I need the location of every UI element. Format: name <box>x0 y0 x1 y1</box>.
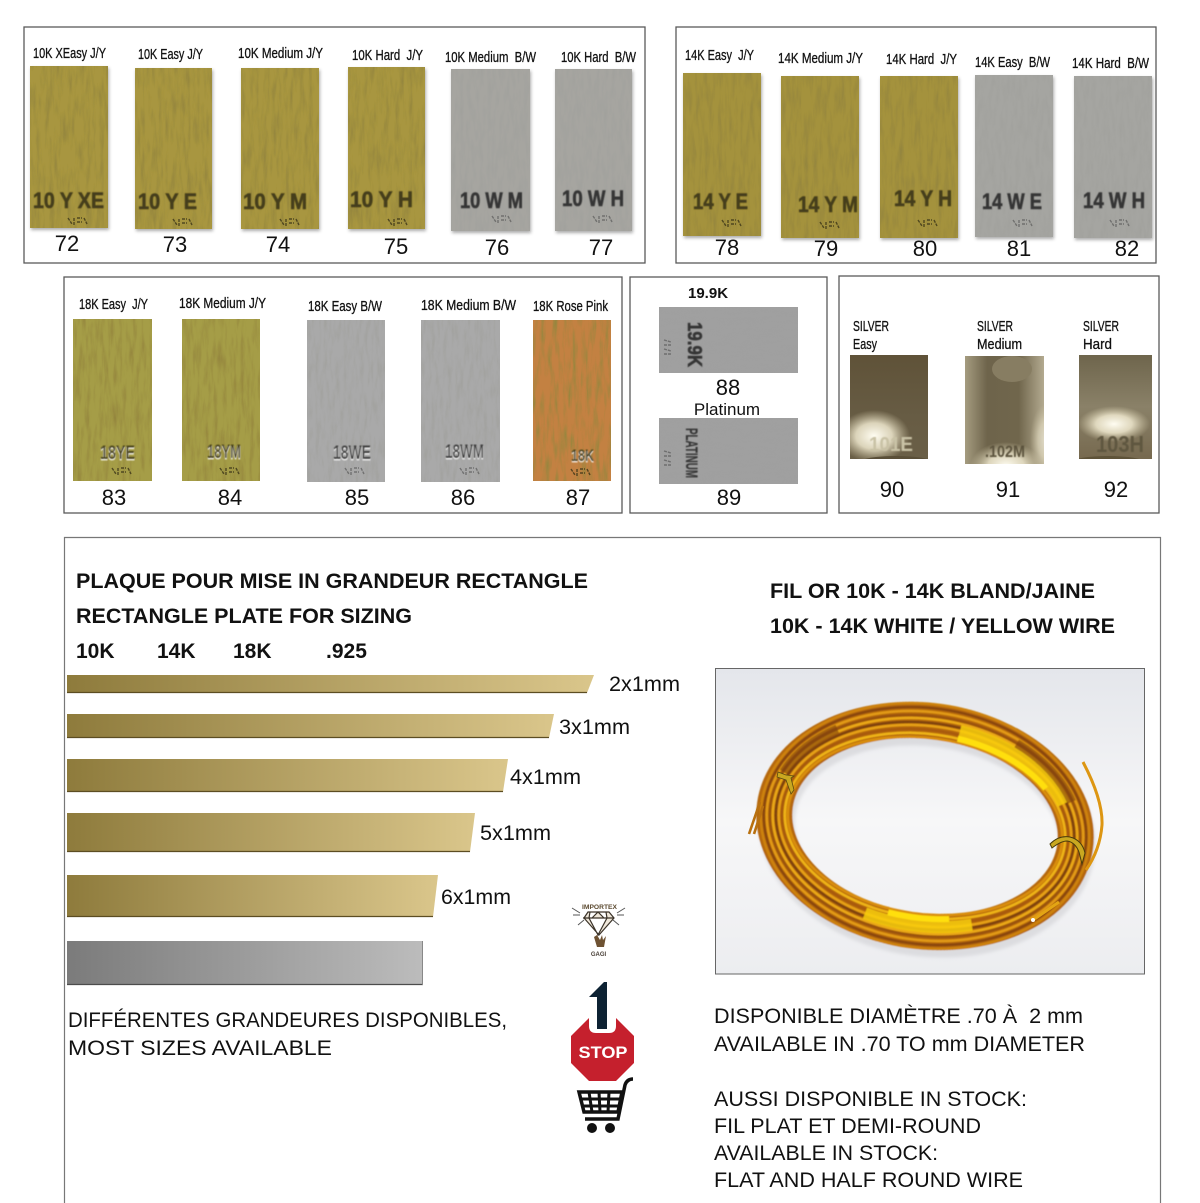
icon: 1 stop sign: STOP <box>578 1043 628 1062</box>
plate labels 14K: 14K Easy J/Y <box>685 47 754 64</box>
plate 78: 14K Easy yellow <box>683 73 762 238</box>
plate numbers 72-77: 72 <box>55 231 79 256</box>
plate labels 18K: 18K Easy B/W <box>308 298 383 315</box>
plate 89: platinum: PLATINUM <box>682 428 701 478</box>
bar: 4x1mm: 4x1mm <box>510 765 581 789</box>
plate labels 18K: 18K Medium B/W <box>421 297 517 314</box>
bar: 4x1mm <box>67 759 581 792</box>
karat list <box>76 640 367 663</box>
plate 73: 10K Easy yellow: 10 Y E <box>138 189 197 214</box>
plate 92: silver hard: 103H <box>1096 431 1144 457</box>
text: sizes available: DIFFÉRENTES GRANDEURES DISPONIBLES, <box>68 1007 507 1032</box>
heading: wire: FIL OR 10K - 14K BLAND/JAINE <box>770 580 1095 603</box>
plate 79: 14K Medium yellow: 14 Y M <box>798 192 858 217</box>
plate 87: 18K rose pink <box>533 320 611 481</box>
plate 88: 19.9K <box>659 307 798 373</box>
plate labels 10K: 10K Medium J/Y <box>238 45 323 62</box>
number 88: 88 <box>716 375 740 400</box>
plate numbers 83-87: 87 <box>566 485 590 510</box>
plate 80: 14K Hard yellow: 14 Y H <box>894 186 952 211</box>
plate numbers 90-92: 92 <box>1104 477 1128 502</box>
plate 84: 18K Medium yellow: 18YM <box>207 442 241 463</box>
icon: Importex Gagi diamond logo: GAGI <box>591 952 606 958</box>
plate 75: 10K Hard yellow <box>348 67 426 231</box>
bar: 2x1mm <box>67 672 680 696</box>
plate labels 10K: 10K Medium B/W <box>445 49 537 66</box>
silver labels: SILVER <box>1083 318 1119 335</box>
plate 80: 14K Hard yellow <box>880 76 959 240</box>
plate 77: 10K Hard white: 10 W H <box>562 186 624 211</box>
plate 74: 10K Medium yellow: 10 Y M <box>243 189 307 214</box>
plate numbers 78-82: 81 <box>1007 236 1031 261</box>
plate 86: 18K Medium white <box>421 320 500 482</box>
text: wire availability: DISPONIBLE DIAMÈTRE .70 À 2 mm <box>714 1003 1083 1028</box>
plate numbers 78-82: 79 <box>814 236 838 261</box>
bar: silver plate <box>67 941 423 985</box>
plate numbers 72-77: 73 <box>163 232 187 257</box>
karat list: 10K <box>76 640 115 663</box>
plate 91: silver medium: .102M <box>985 442 1025 461</box>
karat list: 14K <box>157 640 196 663</box>
plate labels 10K: 10K Hard J/Y <box>352 47 423 64</box>
plate 75: 10K Hard yellow: 10 Y H <box>350 187 413 212</box>
text: wire availability: FLAT AND HALF ROUND WIRE <box>714 1168 1023 1192</box>
panel: silver plates <box>838 276 1159 513</box>
plate labels 10K: 10K XEasy J/Y <box>33 45 106 62</box>
silver labels: Easy <box>853 336 877 353</box>
text: sizes available: MOST SIZES AVAILABLE <box>68 1036 332 1060</box>
silver labels <box>853 318 1119 353</box>
plate numbers 90-92 <box>880 477 1128 502</box>
plate 81: 14K Easy white <box>975 75 1054 239</box>
plate numbers 78-82: 78 <box>715 235 739 260</box>
text: wire availability: AVAILABLE IN .70 TO mm DIAMETER <box>714 1032 1085 1056</box>
plate 83: 18K Easy yellow <box>73 319 152 481</box>
karat list: 18K <box>233 640 272 663</box>
bar: 3x1mm: 3x1mm <box>559 715 630 739</box>
icon: 1 stop sign <box>571 982 634 1081</box>
plate numbers 83-87 <box>102 485 590 510</box>
text: sizes available <box>68 1007 507 1060</box>
plate labels 18K: 18K Medium J/Y <box>179 295 266 312</box>
text: wire availability: AUSSI DISPONIBLE IN STOCK: <box>714 1087 1027 1111</box>
heading: Platinum: Platinum <box>694 400 760 419</box>
plate labels 18K <box>79 295 608 315</box>
silver labels: SILVER <box>853 318 889 335</box>
plate numbers 90-92: 91 <box>996 477 1020 502</box>
plate 79: 14K Medium yellow <box>781 76 860 240</box>
icon: Importex Gagi diamond logo: IMPORTEX <box>582 904 618 911</box>
plate numbers 78-82 <box>715 235 1139 261</box>
plate 74: 10K Medium yellow <box>241 68 320 231</box>
plate 84: 18K Medium yellow <box>182 319 260 481</box>
plate numbers 72-77: 74 <box>266 232 290 257</box>
plate 82: 14K Hard white: 14 W H <box>1083 188 1145 213</box>
plate 81: 14K Easy white: 14 W E <box>982 189 1042 214</box>
silver labels: Hard <box>1083 336 1112 353</box>
panel: 19.9K and platinum plates <box>630 277 827 513</box>
plate 90: silver easy: 101E <box>869 434 913 456</box>
plate 76: 10K Medium white <box>451 69 531 233</box>
plate labels 18K: 18K Rose Pink <box>533 298 608 315</box>
bar: 6x1mm <box>67 875 511 917</box>
bar: 5x1mm: 5x1mm <box>480 821 551 845</box>
plate 90: silver easy <box>850 355 928 459</box>
plate labels 14K: 14K Medium J/Y <box>778 50 863 67</box>
plate 76: 10K Medium white: 10 W M <box>460 188 523 213</box>
plate numbers 83-87: 84 <box>218 485 242 510</box>
icon: shopping cart <box>579 1079 633 1132</box>
photo: gold wire coil <box>716 668 1144 974</box>
heading: rectangle plate: RECTANGLE PLATE FOR SIZING <box>76 605 412 628</box>
plate 72: 10K XEasy yellow <box>30 66 109 230</box>
plate 77: 10K Hard white <box>555 69 633 233</box>
plate numbers 78-82: 80 <box>913 236 937 261</box>
bar: 2x1mm: 2x1mm <box>609 672 680 696</box>
plate 82: 14K Hard white <box>1074 76 1153 240</box>
plate labels 14K: 14K Hard B/W <box>1072 55 1150 72</box>
plate 83: 18K Easy yellow: 18YE <box>100 443 135 464</box>
silver labels: Medium <box>977 336 1022 353</box>
plate labels 14K: 14K Easy B/W <box>975 54 1051 71</box>
plate labels 14K <box>685 47 1150 72</box>
plate labels 10K: 10K Hard B/W <box>561 49 637 66</box>
text: wire availability <box>714 1003 1085 1192</box>
plate numbers 83-87: 86 <box>451 485 475 510</box>
panel: 10K plates <box>24 27 645 263</box>
heading: 19.9K: 19.9K <box>688 285 728 302</box>
plate 73: 10K Easy yellow <box>135 68 213 231</box>
plate labels 10K: 10K Easy J/Y <box>138 46 203 63</box>
plate labels 18K: 18K Easy J/Y <box>79 296 148 313</box>
heading: rectangle plate: PLAQUE POUR MISE IN GRANDEUR RECTANGLE <box>76 570 588 593</box>
plate 72: 10K XEasy yellow: 10 Y XE <box>33 188 104 213</box>
karat list: .925 <box>326 640 367 663</box>
heading: rectangle plate <box>76 570 588 628</box>
heading: wire <box>770 580 1115 638</box>
plate 88: 19.9K: 19.9K <box>683 322 705 367</box>
plate numbers 78-82: 82 <box>1115 236 1139 261</box>
plate 92: silver hard <box>1079 355 1152 459</box>
plate numbers 83-87: 83 <box>102 485 126 510</box>
bar: 5x1mm <box>67 813 551 852</box>
panel: 14K plates <box>676 27 1156 263</box>
panel: plates and wire products <box>64 538 1160 1203</box>
plate labels 14K: 14K Hard J/Y <box>886 51 957 68</box>
text: wire availability: FIL PLAT ET DEMI-ROUND <box>714 1114 981 1138</box>
bar: 3x1mm <box>67 714 630 739</box>
plate numbers 72-77: 76 <box>485 235 509 260</box>
bar: 6x1mm: 6x1mm <box>441 885 511 909</box>
heading: wire: 10K - 14K WHITE / YELLOW WIRE <box>770 615 1115 638</box>
plate numbers 90-92: 90 <box>880 477 904 502</box>
plate 78: 14K Easy yellow: 14 Y E <box>693 189 748 214</box>
plate labels 10K <box>33 45 637 66</box>
plate 86: 18K Medium white: 18WM <box>445 442 484 463</box>
plate numbers 72-77: 77 <box>589 235 613 260</box>
number 89: 89 <box>717 485 741 510</box>
plate 89: platinum <box>659 418 798 484</box>
panel: 18K plates <box>64 277 622 513</box>
plate numbers 72-77: 75 <box>384 234 408 259</box>
silver labels: SILVER <box>977 318 1013 335</box>
icon: Importex Gagi diamond logo <box>572 904 625 958</box>
plate numbers 83-87: 85 <box>345 485 369 510</box>
plate 85: 18K Easy white: 18WE <box>333 443 371 464</box>
plate 87: 18K rose pink: 18K <box>571 446 595 465</box>
plate numbers 72-77 <box>55 231 613 260</box>
text: wire availability: AVAILABLE IN STOCK: <box>714 1141 938 1165</box>
plate 91: silver medium <box>965 356 1044 464</box>
plate 85: 18K Easy white <box>307 320 385 482</box>
